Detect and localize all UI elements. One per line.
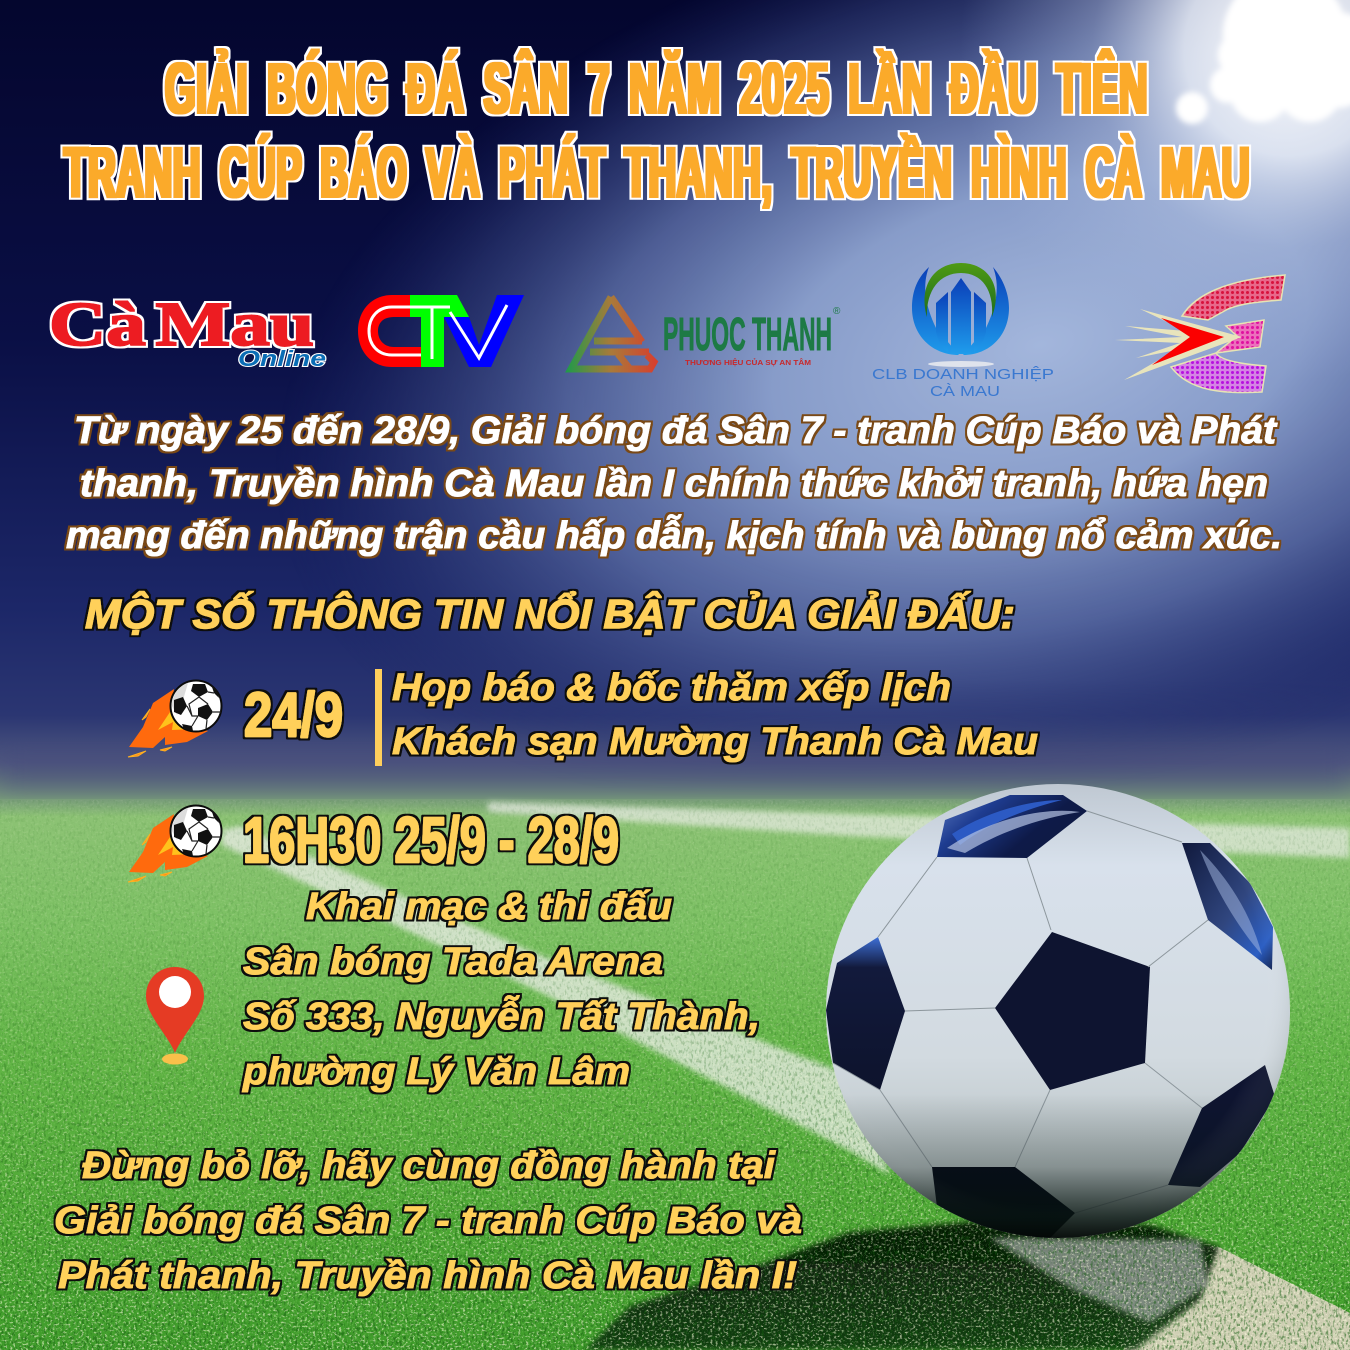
venue details: Sân bóng Tada Arena xyxy=(243,941,663,983)
press conference details xyxy=(392,667,1038,763)
closing call to action: Phát thanh, Truyền hình Cà Mau lần I! xyxy=(58,1255,797,1297)
logo: Cà Mau Online: Online xyxy=(238,346,326,371)
closing call to action: Giải bóng đá Sân 7 - tranh Cúp Báo và xyxy=(54,1200,802,1242)
venue details xyxy=(242,886,760,1093)
date 24/9: 24/9 xyxy=(244,681,343,750)
closing call to action: Đừng bỏ lỡ, hãy cùng đồng hành tại xyxy=(82,1145,777,1187)
vertical divider xyxy=(375,669,382,766)
logo: Cà Mau Online: Cà Mau xyxy=(49,291,314,359)
title xyxy=(64,49,1250,213)
intro paragraph: thanh, Truyền hình Cà Mau lần I chính thức khởi tranh, hứa hẹn xyxy=(80,463,1268,505)
logo: CLB Doanh Nghiệp Cà Mau xyxy=(872,263,1054,400)
press conference details: Họp báo & bốc thăm xếp lịch xyxy=(392,667,951,709)
pitch lines xyxy=(222,802,1350,1175)
section heading: MỘT SỐ THÔNG TIN NỔI BẬT CỦA GIẢI ĐẤU: xyxy=(85,590,1015,637)
logo row xyxy=(49,263,1285,400)
icon: flaming football xyxy=(128,806,222,882)
soccer ball xyxy=(820,784,1300,1245)
press conference details: Khách sạn Mường Thanh Cà Mau xyxy=(392,721,1038,763)
intro paragraph: Từ ngày 25 đến 28/9, Giải bóng đá Sân 7 - tranh Cúp Báo và Phát xyxy=(74,410,1277,452)
intro paragraph: mang đến những trận cầu hấp dẫn, kịch tính và bùng nổ cảm xúc. xyxy=(66,513,1282,557)
logo: Phước Thành: PHUOC THANH xyxy=(663,308,832,360)
logo: Phước Thành: THƯƠNG HIỆU CỦA SỰ AN TÂM xyxy=(685,358,811,367)
venue details: Khai mạc & thi đấu xyxy=(306,886,672,928)
turf touchline by ball xyxy=(1095,1240,1350,1350)
icon: flaming football xyxy=(128,680,222,757)
date range: 16H30 25/9 - 28/9 xyxy=(243,804,619,876)
logo: Phước Thành xyxy=(571,297,841,369)
logo: CLB Doanh Nghiệp Cà Mau: CÀ MAU xyxy=(930,383,1000,400)
item: opening 16H30 25/9 - 28/9 xyxy=(128,804,760,1093)
logo: E arrow emblem xyxy=(1115,275,1285,393)
intro paragraph xyxy=(66,410,1282,557)
closing call to action xyxy=(54,1145,802,1297)
item: press conference 24/9 xyxy=(128,667,1038,766)
icon: location pin xyxy=(146,967,204,1064)
logo: Phước Thành: ® xyxy=(833,306,841,317)
venue details: phường Lý Văn Lâm xyxy=(242,1051,630,1093)
logo: Cà Mau Online xyxy=(49,291,326,371)
ball shadow on grass xyxy=(585,1222,1219,1350)
venue details: Số 333, Nguyễn Tất Thành, xyxy=(243,994,760,1038)
logo: CTV xyxy=(358,295,524,367)
logo: CLB Doanh Nghiệp Cà Mau: CLB DOANH NGHIỆP xyxy=(872,366,1054,383)
